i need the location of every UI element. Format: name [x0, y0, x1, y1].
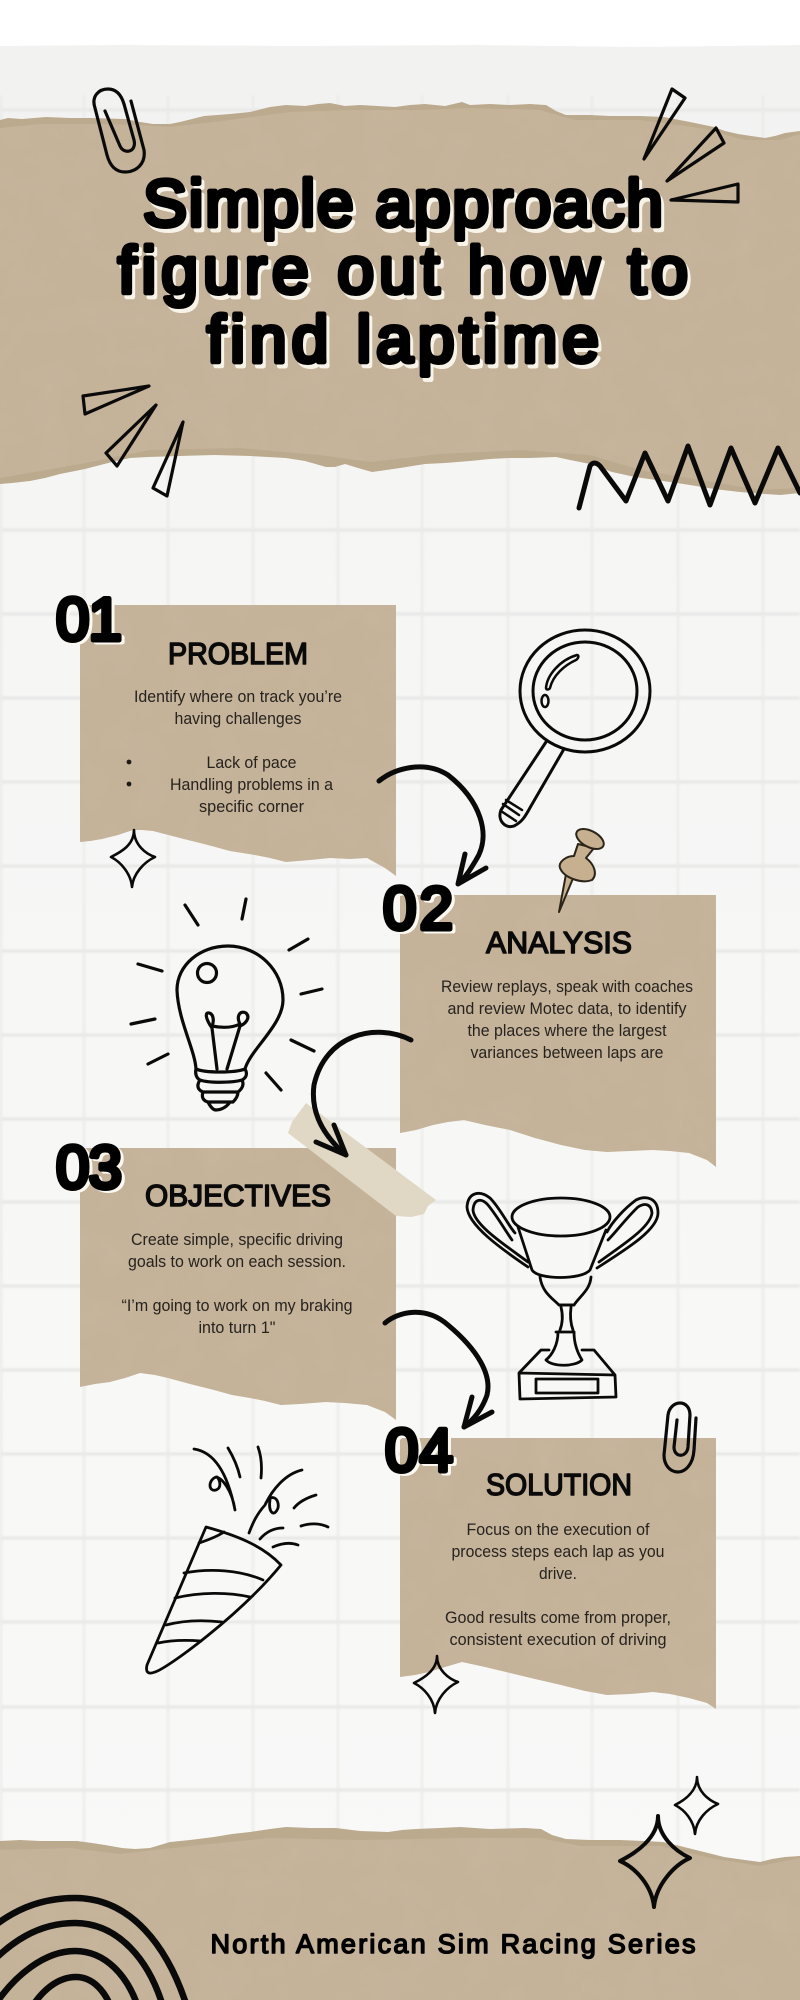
- text: objectives body: goals to work on each session.: [128, 1253, 346, 1271]
- panel: analysis: [400, 895, 716, 1167]
- panel: objectives: [80, 1148, 396, 1420]
- panel: problem: [80, 605, 396, 876]
- icon: sparkle small right: [675, 1777, 718, 1834]
- heading: analysis: ANALYSIS: [486, 925, 632, 960]
- text: solution body: Good results come from proper,: [445, 1609, 671, 1627]
- number 02: 02: [386, 877, 456, 944]
- tape: [288, 1103, 436, 1217]
- footer torn paper: [0, 1827, 800, 2000]
- text: problem body: Handling problems in a: [170, 776, 334, 794]
- icon: light bulb: [131, 899, 322, 1110]
- arrow: analysis to objectives: [313, 1032, 411, 1155]
- number 02: 02: [383, 875, 453, 942]
- text: solution body: [445, 1521, 671, 1649]
- heading: solution: SOLUTION: [486, 1467, 632, 1502]
- title: find laptime: [210, 306, 602, 380]
- number 04: 04: [385, 1417, 453, 1484]
- text: objectives body: Create simple, specific driving: [131, 1231, 343, 1249]
- footer text: North American Sim Racing Series: [210, 1929, 696, 1959]
- text: objectives body: into turn 1": [198, 1319, 276, 1337]
- number 03: 03: [59, 1136, 125, 1203]
- heading: objectives: OBJECTIVES: [145, 1178, 331, 1213]
- text: problem body: Lack of pace: [206, 754, 296, 772]
- text: solution body: process steps each lap as you: [452, 1543, 664, 1561]
- icon: rays bottom left of banner: [83, 386, 183, 496]
- title: figure out how to: [121, 237, 691, 311]
- torn paper title banner: [0, 102, 800, 495]
- arrow: problem to analysis: [379, 767, 486, 884]
- icon: sparkle near solution: [414, 1656, 458, 1713]
- text: solution body: consistent execution of driving: [450, 1631, 666, 1649]
- text: problem body: specific corner: [199, 798, 304, 816]
- icon: party popper: [147, 1447, 328, 1673]
- icon: sparkle large right: [620, 1816, 690, 1907]
- icon: zigzag scribble: [579, 446, 800, 508]
- panel: solution: [400, 1438, 716, 1709]
- number 01: 01: [59, 588, 125, 655]
- title: figure out how to: [118, 233, 688, 307]
- text: analysis body: variances between laps are: [470, 1044, 664, 1062]
- text: objectives body: [122, 1231, 352, 1337]
- text: analysis body: [441, 978, 693, 1062]
- text: analysis body: Review replays, speak with coaches: [441, 978, 693, 996]
- icon: sparkle near problem: [111, 830, 155, 887]
- icon: magnifying glass: [500, 630, 650, 827]
- icon: concentric arches: [0, 1898, 188, 2000]
- title: Simple approach: [143, 166, 663, 240]
- number 04: 04: [388, 1419, 456, 1486]
- icon: rays top right: [644, 89, 738, 202]
- title: [118, 166, 691, 380]
- icon: trophy: [467, 1193, 658, 1399]
- text: problem body: having challenges: [174, 710, 302, 728]
- text: objectives body: “I’m going to work on my braking: [122, 1297, 352, 1315]
- text: solution body: drive.: [539, 1565, 577, 1583]
- icon: paperclip on solution: [664, 1403, 696, 1472]
- text: problem body: [127, 688, 342, 816]
- title: find laptime: [207, 302, 599, 376]
- title: Simple approach: [146, 170, 666, 244]
- arrow: objectives to solution: [385, 1312, 492, 1427]
- text: analysis body: and review Motec data, to identify: [448, 1000, 687, 1018]
- number 01: 01: [56, 586, 122, 653]
- text: solution body: Focus on the execution of: [466, 1521, 650, 1539]
- icon: push pin: [559, 825, 607, 912]
- heading: problem: PROBLEM: [168, 636, 308, 671]
- text: problem body: Identify where on track you’re: [134, 688, 342, 706]
- text: analysis body: the places where the largest: [468, 1022, 667, 1040]
- icon: paperclip top: [94, 89, 144, 172]
- number 03: 03: [56, 1134, 122, 1201]
